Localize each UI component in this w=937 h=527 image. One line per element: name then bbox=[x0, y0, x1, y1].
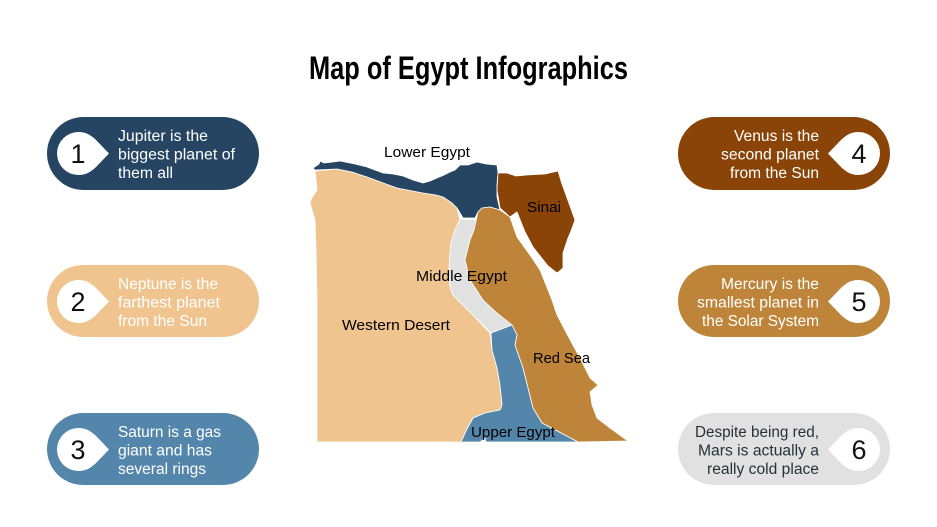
badge 4: 4 bbox=[851, 139, 867, 169]
text 1: them all bbox=[118, 165, 173, 182]
region: Red Sea bbox=[465, 207, 628, 442]
badge 5 bbox=[828, 280, 880, 323]
badge 1: 1 bbox=[70, 139, 86, 169]
text 1: Jupiter is the bbox=[118, 128, 208, 145]
callout 3 bbox=[47, 413, 259, 485]
text 6 bbox=[695, 424, 819, 478]
badge 3: 3 bbox=[70, 435, 86, 465]
text 5: Mercury is the bbox=[721, 276, 819, 293]
map label: Red Sea: Red Sea bbox=[533, 351, 590, 367]
text 3 bbox=[118, 424, 221, 478]
text 6: Despite being red, bbox=[695, 424, 819, 441]
badge 6 bbox=[828, 428, 880, 471]
region: Lower Egypt bbox=[313, 161, 500, 218]
map label: Middle Egypt: Middle Egypt bbox=[416, 269, 507, 285]
callout 5 bbox=[678, 265, 890, 337]
text 1 bbox=[118, 128, 236, 182]
text 5 bbox=[697, 276, 819, 330]
text 2: farthest planet bbox=[118, 294, 221, 312]
callout 4 bbox=[678, 117, 890, 190]
title: Map of Egypt Infographics bbox=[309, 50, 628, 86]
region: Upper Egypt bbox=[461, 325, 578, 442]
text 5: smallest planet in bbox=[697, 294, 819, 312]
text 2: from the Sun bbox=[118, 313, 207, 330]
badge 3 bbox=[57, 428, 109, 471]
text 4: Venus is the bbox=[734, 128, 819, 145]
map label: Sinai: Sinai bbox=[527, 200, 561, 216]
callout 2 bbox=[47, 265, 259, 337]
map of Egypt bbox=[310, 161, 628, 442]
text 6: Mars is actually a bbox=[698, 442, 819, 460]
badge 2: 2 bbox=[70, 287, 86, 317]
text 3: Saturn is a gas bbox=[118, 424, 221, 441]
text 2 bbox=[118, 276, 221, 330]
text 3: several rings bbox=[118, 461, 206, 478]
map label: Lower Egypt: Lower Egypt bbox=[384, 145, 470, 161]
map label: Upper Egypt: Upper Egypt bbox=[471, 425, 555, 441]
callout 6 bbox=[678, 413, 890, 485]
text 5: the Solar System bbox=[702, 313, 819, 330]
region: Middle Egypt bbox=[449, 219, 512, 333]
text 3: giant and has bbox=[118, 442, 212, 460]
region: Western Desert bbox=[310, 169, 502, 442]
text 1: biggest planet of bbox=[118, 146, 236, 164]
badge 2 bbox=[57, 280, 109, 323]
badge 5: 5 bbox=[851, 287, 867, 317]
text 4 bbox=[721, 128, 820, 182]
badge 4 bbox=[828, 132, 880, 175]
map label: Western Desert: Western Desert bbox=[342, 318, 450, 334]
text 6: really cold place bbox=[707, 461, 819, 478]
text 2: Neptune is the bbox=[118, 276, 218, 293]
region: Sinai bbox=[497, 171, 575, 273]
badge 1 bbox=[57, 132, 109, 175]
badge 6: 6 bbox=[851, 435, 867, 465]
callout 1 bbox=[47, 117, 259, 190]
text 4: second planet bbox=[721, 146, 820, 164]
text 4: from the Sun bbox=[730, 165, 819, 182]
